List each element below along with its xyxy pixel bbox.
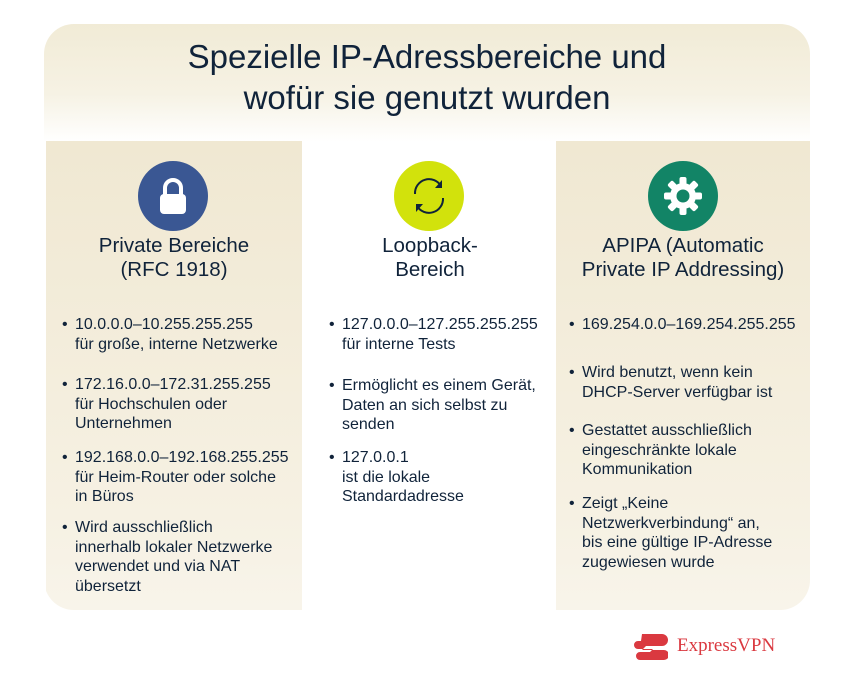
title: Spezielle IP-Adressbereiche und — [188, 38, 666, 75]
bullets — [62, 316, 289, 594]
panel: loopback: Daten an sich selbst zu — [342, 396, 507, 414]
panel: loopback: Ermöglicht es einem Gerät, — [342, 377, 536, 394]
panel: private: 192.168.0.0–192.168.255.255 — [75, 449, 289, 466]
panel: apipa — [556, 141, 810, 610]
panel: loopback: 127.0.0.1 — [342, 449, 409, 466]
heading — [99, 234, 249, 281]
heading: Private Bereiche — [99, 234, 249, 257]
heading: Loopback- — [382, 234, 478, 257]
panel: apipa: Netzwerkverbindung“ an, — [582, 514, 760, 532]
logo: ExpressVPN — [634, 634, 775, 660]
panel: loopback: für interne Tests — [342, 336, 456, 352]
panel: loopback: Standardadresse — [342, 488, 464, 505]
panel: private: Unternehmen — [75, 415, 172, 432]
panel: private: für Heim-Router oder solche — [75, 468, 276, 486]
panel: loopback: ist die lokale — [342, 468, 430, 486]
panel: private: innerhalb lokaler Netzwerke — [75, 538, 272, 556]
heading — [382, 234, 478, 281]
panel: loopback — [330, 161, 538, 505]
panel: private: für große, interne Netzwerke — [75, 336, 278, 352]
panel: apipa: Wird benutzt, wenn kein — [582, 364, 753, 381]
panel: private: übersetzt — [75, 578, 141, 594]
panel: apipa: Gestattet ausschließlich — [582, 422, 752, 439]
card — [44, 24, 810, 610]
panel: loopback: 127.0.0.0–127.255.255.255 — [342, 316, 538, 333]
icon: loop — [394, 161, 464, 231]
panel: apipa: eingeschränkte lokale — [582, 442, 737, 458]
panel: private: 10.0.0.0–10.255.255.255 — [75, 316, 253, 333]
heading — [582, 234, 784, 281]
heading: (RFC 1918) — [120, 258, 228, 281]
panel: private: in Büros — [75, 488, 134, 505]
panel: apipa: 169.254.0.0–169.254.255.255 — [582, 316, 796, 333]
heading: Bereich — [395, 258, 465, 281]
panel: private: Wird ausschließlich — [75, 519, 213, 536]
title: wofür sie genutzt wurden — [244, 79, 610, 116]
logo: ExpressVPN: ExpressVPN — [677, 635, 775, 656]
title — [188, 38, 666, 116]
panel: apipa: Kommunikation — [582, 461, 692, 478]
icon: lock — [138, 161, 208, 231]
panel: private: verwendet und via NAT — [75, 558, 240, 575]
panel: apipa: DHCP-Server verfügbar ist — [582, 384, 772, 400]
panel: apipa: bis eine gültige IP-Adresse — [582, 534, 772, 551]
bullets — [330, 316, 538, 505]
icon: gear — [648, 161, 718, 231]
bullets — [570, 316, 796, 570]
panel: apipa: Zeigt „Keine — [582, 495, 668, 512]
panel: private: 172.16.0.0–172.31.255.255 — [75, 376, 271, 393]
heading: APIPA (Automatic — [602, 234, 764, 257]
panel: private: für Hochschulen oder — [75, 396, 227, 412]
panel: apipa: zugewiesen wurde — [582, 554, 715, 570]
panel: private — [46, 141, 302, 610]
heading: Private IP Addressing) — [582, 258, 784, 281]
panel: loopback: senden — [342, 416, 394, 433]
